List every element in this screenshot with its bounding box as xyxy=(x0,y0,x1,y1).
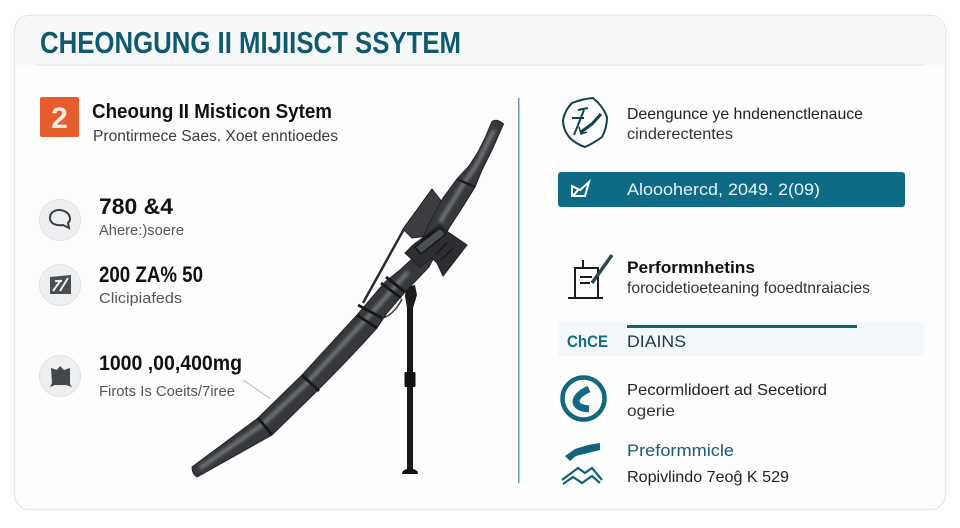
stat 2: 200 ZA% 50 xyxy=(99,262,203,287)
table row: code strip: ChCE xyxy=(567,332,608,351)
section badge: number 2: 2 xyxy=(51,102,68,135)
icon: clipboard and pen xyxy=(568,255,612,298)
block: feature description: Deengunce ye hndenenctlenauce xyxy=(627,106,863,123)
icon: animal silhouette xyxy=(565,443,600,461)
tube body xyxy=(192,120,504,477)
icon: vehicle xyxy=(40,356,80,396)
icon: speech bubble xyxy=(40,200,80,240)
stand xyxy=(383,285,418,474)
icon: teal ring xyxy=(562,378,604,420)
rear clamp plate xyxy=(403,189,442,238)
tube rings xyxy=(258,277,405,435)
strut xyxy=(363,229,404,303)
stat 1: Ahere:)soere xyxy=(99,222,184,239)
block: feature description: cinderectentes xyxy=(627,126,733,143)
block: terrain performance: Ropivlindo 7eoĝ K 529 xyxy=(627,469,789,486)
stat 1: 780 &4 xyxy=(99,194,174,219)
table row: code strip xyxy=(558,322,924,356)
stat 3 xyxy=(40,352,242,400)
illustration: missile launcher tube on stand xyxy=(192,120,504,477)
leader line xyxy=(243,380,271,399)
block: performance: Performnhetins xyxy=(627,259,755,277)
section badge: number 2 xyxy=(40,97,79,137)
icon: framed chart xyxy=(40,264,80,306)
stat 1 xyxy=(40,194,184,240)
icon: seal with arrows xyxy=(563,98,607,147)
clamp block xyxy=(405,225,467,276)
title: CHEONGUNG II MIJIISCT SSYTEM xyxy=(40,25,461,60)
table row: code strip: DIAINS xyxy=(627,332,686,351)
clamp details xyxy=(415,228,453,260)
stat 3: Firots Is Coeits/7iree xyxy=(99,383,235,400)
block: terrain performance: Preformmicle xyxy=(627,441,734,460)
block: performance xyxy=(568,255,870,298)
stat 2 xyxy=(40,262,203,307)
banner: teal date bar: Alooohercd, 2049. 2(09) xyxy=(627,180,820,199)
stat 3: 1000 ,00,400mg xyxy=(99,352,242,375)
vertical divider xyxy=(518,98,520,483)
banner: teal date bar xyxy=(558,172,905,207)
tube highlight xyxy=(200,130,494,468)
icon: mountains xyxy=(562,468,602,484)
section heading: Cheoung II Misticon Sytem xyxy=(92,101,332,123)
section heading: Prontirmece Saes. Xoet enntioedes xyxy=(93,128,338,145)
icon: envelope check xyxy=(572,182,589,196)
block: terrain performance xyxy=(562,441,789,486)
block: performance: forocidetioeteaning fooedtnraiacies xyxy=(627,280,870,297)
block: record note: ogerie xyxy=(627,403,675,420)
block: record note xyxy=(562,378,827,420)
section heading xyxy=(92,101,338,145)
stat 2: Clicipiafeds xyxy=(99,290,182,307)
block: record note: Pecormlidoert ad Secetiord xyxy=(627,382,827,399)
block: feature description xyxy=(563,98,863,147)
